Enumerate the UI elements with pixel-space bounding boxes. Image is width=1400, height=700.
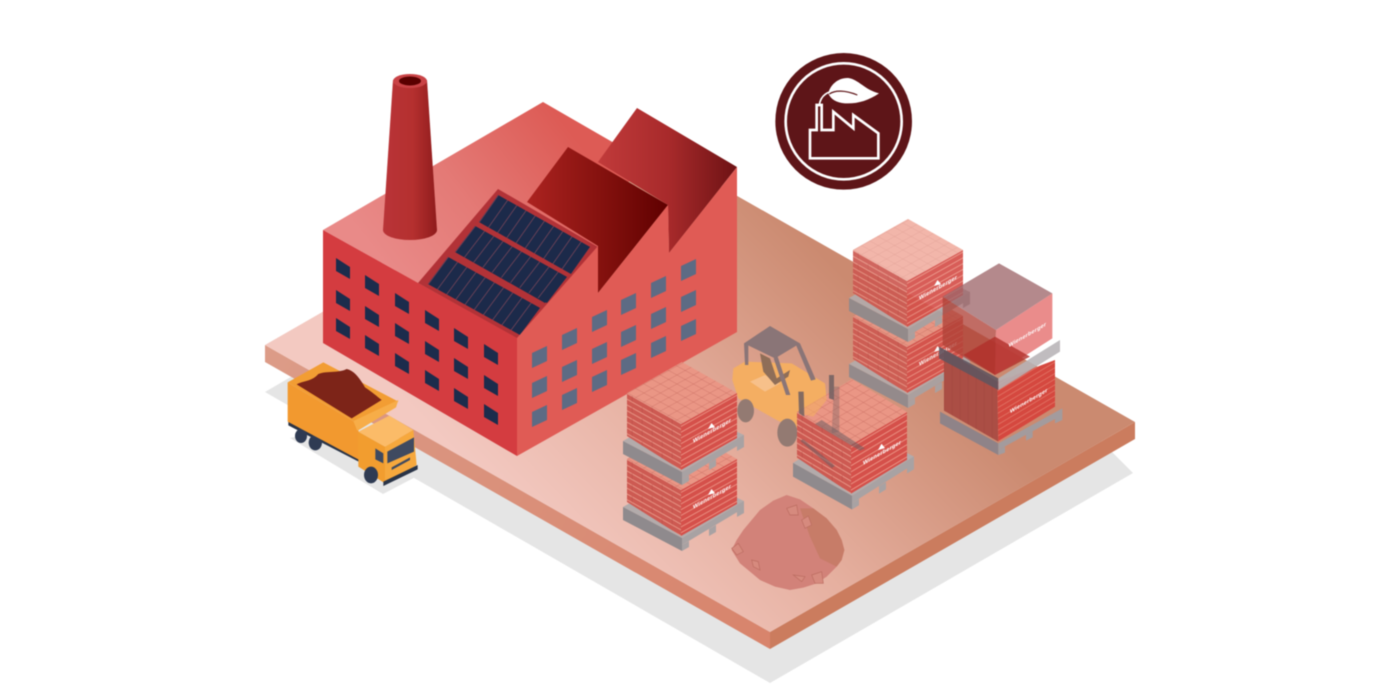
brick pallet cluster: right: Wienerberger xyxy=(1009,322,1047,349)
truck rear wheels xyxy=(295,429,322,450)
brick pallet cluster: right xyxy=(939,263,1062,455)
right wall xyxy=(517,167,737,456)
brick pallet: front upper: Wienerberger xyxy=(693,418,732,445)
brick pallet: back upper and lower xyxy=(849,219,970,408)
roof xyxy=(323,102,640,338)
upper pallet xyxy=(939,340,1060,390)
sawtooth roof front xyxy=(527,147,668,293)
lower stack right face xyxy=(997,360,1055,442)
brick pallet: centre: Wienerberger xyxy=(863,440,902,467)
forklift mast and forks xyxy=(798,375,865,468)
forklift cab frame xyxy=(744,326,816,395)
platform xyxy=(265,135,1135,649)
upper stack left face translucent xyxy=(943,297,996,375)
forklift front wheel xyxy=(777,419,797,447)
icon: eco factory badge xyxy=(775,53,912,190)
truck cargo box xyxy=(288,362,398,460)
brick pallet: centre xyxy=(793,379,914,510)
brick pallet: front lower xyxy=(623,428,744,551)
brick pallet: back upper and lower: Wienerberger xyxy=(919,341,958,368)
solar panel frame xyxy=(418,189,598,340)
lower stack left face xyxy=(944,350,998,442)
brick pallet: back upper and lower: Wienerberger xyxy=(919,275,958,302)
brick pallet: front upper xyxy=(623,362,744,485)
upper stack right face translucent xyxy=(995,293,1052,375)
left wall xyxy=(323,230,517,456)
sawtooth roof back xyxy=(598,108,737,253)
right wall windows xyxy=(532,259,696,427)
truck chassis xyxy=(288,421,359,462)
forklift rear wheel xyxy=(737,399,754,422)
clay pile xyxy=(732,495,844,590)
left wall windows xyxy=(336,258,498,425)
overlap red block xyxy=(963,337,1030,375)
factory building xyxy=(323,74,737,456)
lower pallet xyxy=(940,408,1062,455)
truck cab xyxy=(358,416,418,486)
upper stack top translucent xyxy=(943,263,1052,330)
ground shadow xyxy=(265,325,1133,683)
forklift step xyxy=(750,375,780,392)
forklift seat xyxy=(760,353,790,385)
dump truck xyxy=(288,362,418,486)
truck ground shadow xyxy=(290,425,425,494)
chimney xyxy=(383,74,437,240)
forklift xyxy=(732,326,827,447)
forklift body xyxy=(732,362,827,428)
brick pallet: front lower: Wienerberger xyxy=(693,484,732,511)
brick pallet cluster: right: Wienerberger xyxy=(1010,388,1048,415)
